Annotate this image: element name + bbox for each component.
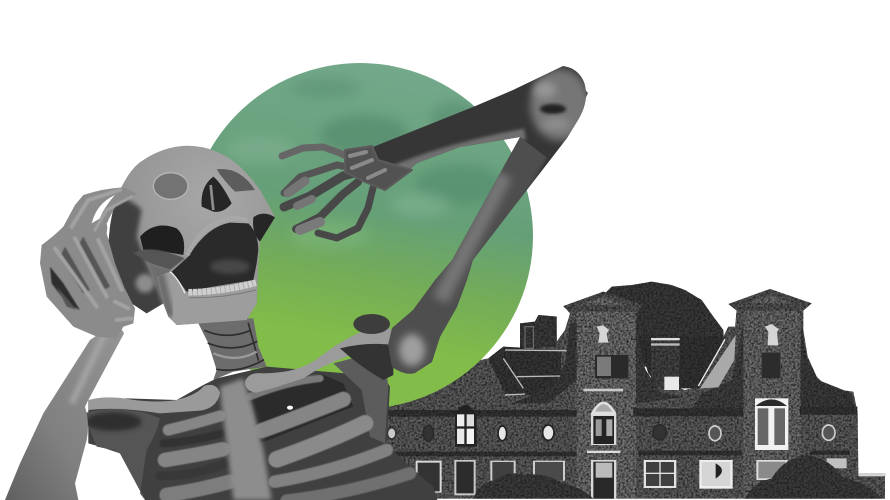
sculpted tower sides <box>512 323 577 403</box>
right clavicle <box>245 327 393 393</box>
scapula right <box>333 350 388 443</box>
large socket <box>140 226 184 255</box>
nose cavity <box>201 177 232 212</box>
ribs right <box>250 378 410 500</box>
raised arm: humerus <box>385 60 595 380</box>
raised arm: forearm <box>374 66 586 168</box>
haunted house <box>385 282 886 499</box>
roof details <box>503 327 736 395</box>
jaw <box>157 272 257 325</box>
upper teeth <box>187 218 248 255</box>
moon <box>187 63 533 409</box>
chimney <box>651 337 680 387</box>
windows: top floor <box>455 324 788 453</box>
windows: ground floor <box>416 458 886 499</box>
lower teeth <box>188 283 256 292</box>
cranium and jaw <box>108 146 275 325</box>
bushes <box>473 455 882 499</box>
neck vertebrae <box>197 318 267 380</box>
shoulder knob <box>353 314 390 334</box>
left scapula <box>83 409 160 500</box>
raised arm lower <box>5 323 124 500</box>
tree behind house <box>598 282 725 367</box>
house silhouette <box>385 289 885 499</box>
towers <box>577 312 636 498</box>
raised hand: fingers and wrist <box>282 146 412 238</box>
left ribs <box>160 416 230 495</box>
cornice <box>385 410 577 417</box>
cheek <box>148 263 190 303</box>
gap between fingers <box>92 195 115 223</box>
upper right cavity <box>250 373 353 443</box>
temple hole <box>253 214 275 242</box>
finger highlights <box>55 190 132 320</box>
ribcage base <box>88 367 437 500</box>
left clavicle <box>88 385 220 413</box>
hand on skull <box>40 187 137 338</box>
eye socket <box>153 173 188 199</box>
skeleton torso <box>5 314 437 500</box>
open mouth <box>172 223 258 292</box>
skull <box>108 146 275 325</box>
lower wall bands <box>388 452 577 456</box>
round windows <box>387 425 835 441</box>
second eye socket <box>217 169 255 192</box>
centre roof <box>637 337 725 388</box>
dark side of cranium <box>108 199 166 314</box>
sternum <box>220 378 272 500</box>
palm shadows <box>50 237 110 310</box>
left roof <box>488 347 562 397</box>
